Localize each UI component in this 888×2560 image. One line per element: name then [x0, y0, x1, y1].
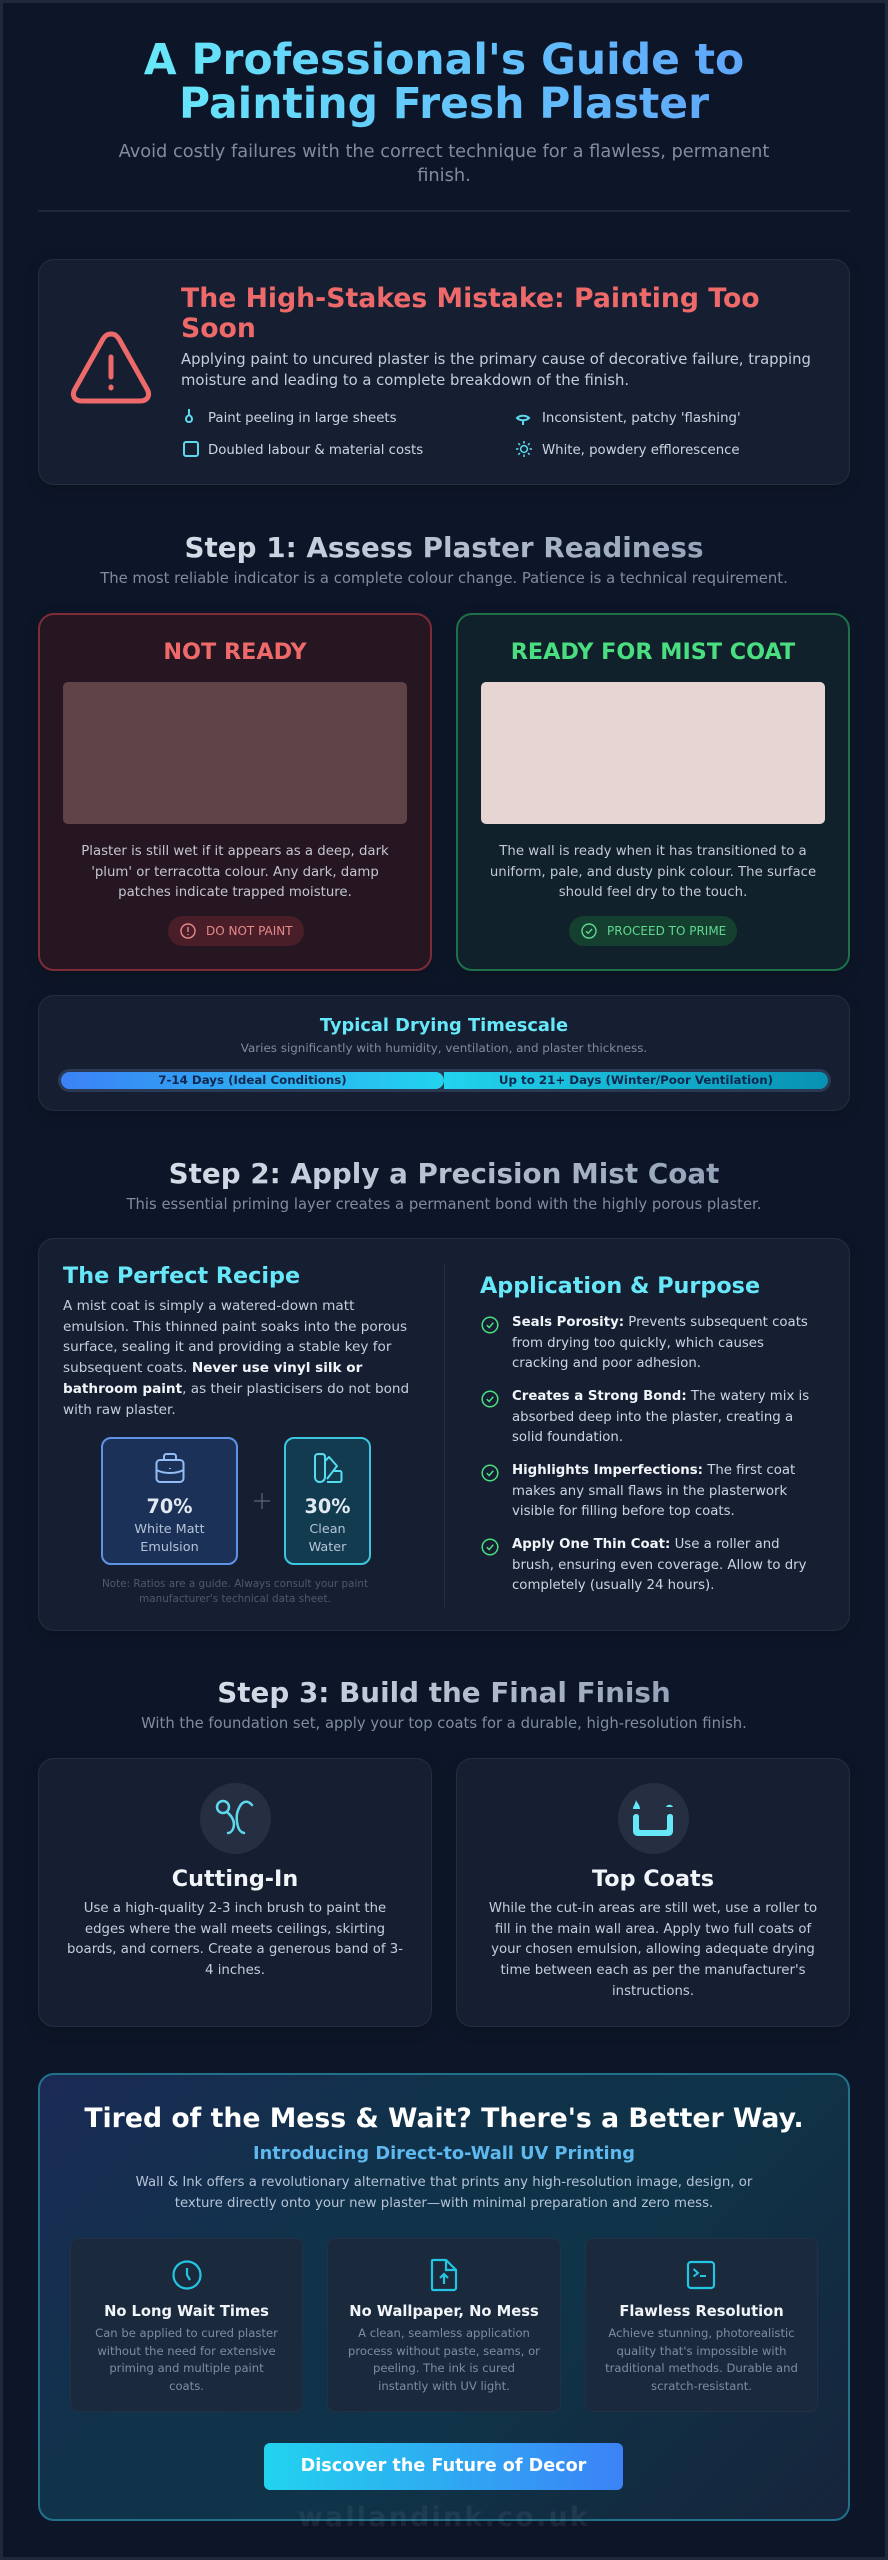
item: flashing: Inconsistent, patchy 'flashing'	[542, 411, 741, 426]
recipe text: surface, sealing it and providing a stable key for	[63, 1339, 391, 1355]
not ready text: patches indicate trapped moisture.	[118, 885, 352, 900]
badge: proceed to prime	[569, 916, 737, 946]
bar segment: winter	[444, 1072, 828, 1089]
top coats text: instructions.	[612, 1984, 694, 1999]
CTA text	[136, 2175, 752, 2211]
swatch: dry plaster	[481, 682, 825, 824]
bar segment: winter: Up to 21+ Days (Winter/Poor Ventilation)	[499, 1073, 773, 1087]
icon: alert circle	[180, 923, 196, 939]
heading: step 3: Step 3: Build the Final Finish	[217, 1676, 671, 1709]
feature title: No Long Wait Times	[104, 2303, 269, 2320]
panel: ready	[456, 613, 850, 971]
roller glyph	[633, 1800, 673, 1836]
top coats text: While the cut-in areas are still wet, use a roller to	[489, 1901, 817, 1916]
recipe text: subsequent coats. Never use vinyl silk or	[63, 1360, 362, 1376]
step 3 subtitle: With the foundation set, apply your top coats for a durable, high-resolution finish.	[141, 1715, 747, 1732]
top coats text: your chosen emulsion, allowing adequate drying	[491, 1942, 815, 1957]
not ready heading: NOT READY	[163, 639, 307, 665]
panel: call to action	[38, 2073, 850, 2521]
feature text: without the need for extensive	[97, 2344, 276, 2358]
cutting-in text: Use a high-quality 2-3 inch brush to paint the	[84, 1901, 386, 1916]
icon: briefcase	[156, 1453, 184, 1483]
icon: flashing	[516, 414, 530, 425]
brush glyph	[216, 1800, 254, 1834]
ratio note: Note: Ratios are a guide. Always consult your paint	[102, 1578, 368, 1590]
icon: costs	[183, 441, 199, 457]
panel: top coats	[456, 1758, 850, 2027]
watermark: wallandink.co.uk	[298, 2502, 590, 2533]
cutting-in text	[67, 1901, 403, 1978]
panel: high-stakes mistake	[38, 259, 850, 485]
top coats heading: Top Coats	[592, 1866, 714, 1892]
label: clean water	[309, 1522, 346, 1555]
item: peeling: Paint peeling in large sheets	[208, 411, 397, 426]
not ready text: 'plum' or terracotta colour. Any dark, damp	[91, 865, 379, 880]
item: thin coat: brush, ensuring even coverage. Allow to dry	[512, 1558, 807, 1573]
icon: check 2	[481, 1390, 499, 1408]
not ready text: Plaster is still wet if it appears as a deep, dark	[81, 844, 389, 859]
feature text	[95, 2326, 278, 2393]
CTA subheading: Introducing Direct-to-Wall UV Printing	[253, 2143, 635, 2164]
icon: file upload	[430, 2258, 458, 2292]
item: seals porosity: Seals Porosity: Prevents subsequent coats	[512, 1315, 808, 1330]
ratio note	[102, 1578, 368, 1605]
title: Painting Fresh Plaster	[179, 80, 709, 129]
CTA text: Wall & Ink offers a revolutionary alternative that prints any high-resolution image, design, or	[136, 2175, 752, 2190]
label: white matt emulsion: Emulsion	[140, 1540, 199, 1555]
recipe text: bathroom paint, as their plasticisers do not bond	[63, 1381, 409, 1397]
top coats text: fill in the main wall area. Apply two full coats of	[495, 1922, 811, 1937]
alert heading: The High-Stakes Mistake: Painting Too	[181, 283, 760, 314]
item: imperfections: visible for filling before top coats.	[512, 1504, 735, 1519]
feature text	[348, 2326, 540, 2393]
alert text	[181, 351, 811, 389]
swatch: wet plaster	[63, 682, 407, 824]
feature text: peeling. The ink is cured	[373, 2361, 515, 2375]
cutting-in text: edges where the wall meets ceilings, skirting	[85, 1922, 385, 1937]
item: imperfections: makes any small flaws in the plasterwork	[512, 1484, 787, 1499]
feature text	[586, 2325, 817, 2396]
item: costs: Doubled labour & material costs	[208, 443, 423, 458]
recipe text: A mist coat is simply a watered-down matt	[63, 1298, 354, 1314]
bar segment: ideal	[61, 1072, 444, 1089]
panel: not ready	[38, 613, 432, 971]
button	[264, 2443, 623, 2490]
cutting-in text: 4 inches.	[205, 1963, 265, 1978]
feature text: traditional methods. Durable and	[605, 2361, 798, 2375]
subtitle: Avoid costly failures with the correct technique for a flawless, permanent	[119, 141, 769, 162]
timescale heading: Typical Drying Timescale	[320, 1015, 568, 1036]
application heading: Application & Purpose	[480, 1273, 760, 1299]
label: clean water: Clean	[309, 1522, 346, 1537]
item: strong bond: solid foundation.	[512, 1430, 623, 1445]
icon: clock	[172, 2260, 202, 2290]
icon: swatch	[314, 1453, 342, 1483]
item: efflorescence: White, powdery efflorescence	[542, 443, 740, 458]
icon: check 3	[481, 1464, 499, 1482]
stat: 30%: 30%	[305, 1495, 350, 1518]
stat: 70%: 70%	[147, 1495, 192, 1518]
item: imperfections	[512, 1463, 795, 1519]
badge label: PROCEED TO PRIME	[607, 924, 726, 938]
title: A Professional's Guide to	[144, 36, 744, 85]
item: strong bond: Creates a Strong Bond: The watery mix is	[512, 1389, 809, 1404]
bar segment: ideal: 7-14 Days (Ideal Conditions)	[158, 1073, 347, 1087]
icon: roller	[618, 1783, 689, 1854]
ratio note: manufacturer's technical data sheet.	[139, 1593, 331, 1605]
CTA text: texture directly onto your new plaster—with minimal preparation and zero mess.	[175, 2196, 713, 2211]
ready text: should feel dry to the touch.	[559, 885, 747, 900]
ratio box: 30% water	[284, 1437, 371, 1565]
button: Discover the Future of Decor	[301, 2456, 586, 2476]
step 1 subtitle: The most reliable indicator is a complete colour change. Patience is a technical requirement.	[100, 570, 788, 587]
feature text: Can be applied to cured plaster	[95, 2326, 278, 2340]
feature: no wallpaper	[327, 2238, 561, 2412]
top coats text: time between each as per the manufacturer's	[500, 1963, 806, 1978]
cutting-in heading: Cutting-In	[172, 1866, 298, 1892]
feature title: No Wallpaper, No Mess	[349, 2303, 539, 2320]
label: white matt emulsion: White Matt	[134, 1522, 205, 1537]
plus sign	[254, 1493, 270, 1509]
feature: flawless resolution	[585, 2238, 818, 2412]
timescale bar	[58, 1069, 831, 1092]
recipe heading: The Perfect Recipe	[63, 1263, 300, 1289]
timescale note: Varies significantly with humidity, ventilation, and plaster thickness.	[241, 1041, 647, 1055]
top coats text	[489, 1901, 817, 1999]
item: imperfections: Highlights Imperfections: The first coat	[512, 1463, 795, 1478]
feature text: A clean, seamless application	[358, 2326, 530, 2340]
icon: sun	[516, 441, 532, 457]
heading: step 1: Step 1: Assess Plaster Readiness	[184, 531, 704, 564]
item: strong bond: absorbed deep into the plaster, creating a	[512, 1410, 793, 1425]
subtitle: finish.	[417, 164, 471, 186]
recipe text: with raw plaster.	[63, 1402, 176, 1418]
icon: warning triangle	[70, 332, 152, 404]
icon: check 1	[481, 1316, 499, 1334]
feature title: Flawless Resolution	[619, 2303, 784, 2320]
icon: brush	[200, 1783, 271, 1854]
feature text: Achieve stunning, photorealistic	[608, 2326, 795, 2340]
item: seals porosity: cracking and poor adhesion.	[512, 1356, 701, 1371]
item: thin coat: completely (usually 24 hours).	[512, 1578, 714, 1593]
CTA heading: Tired of the Mess & Wait? There's a Better Way.	[84, 2103, 804, 2134]
ready text	[490, 844, 816, 900]
label: white matt emulsion	[134, 1522, 205, 1555]
ready text: The wall is ready when it has transitioned to a	[499, 844, 807, 859]
item: strong bond	[512, 1389, 809, 1445]
not ready text	[81, 844, 389, 900]
item: thin coat	[512, 1537, 807, 1593]
badge label: DO NOT PAINT	[206, 924, 293, 938]
heading: step 2: Step 2: Apply a Precision Mist Coat	[169, 1157, 719, 1190]
title	[144, 36, 744, 129]
alert text: moisture and leading to a complete breakdown of the finish.	[181, 372, 629, 389]
icon: check circle	[581, 923, 597, 939]
item: thin coat: Apply One Thin Coat: Use a roller and	[512, 1537, 780, 1552]
icon: terminal	[686, 2260, 716, 2290]
panel: mist coat	[38, 1238, 850, 1631]
feature text: priming and multiple paint	[109, 2361, 264, 2375]
item: seals porosity: from drying too quickly, which causes	[512, 1336, 764, 1351]
step 2 subtitle: This essential priming layer creates a permanent bond with the highly porous plaster.	[127, 1196, 761, 1213]
feature: no long wait times	[70, 2238, 303, 2412]
cutting-in text: boards, and corners. Create a generous band of 3-	[67, 1942, 403, 1957]
feature text: process without paste, seams, or	[348, 2344, 540, 2358]
icon: check 4	[481, 1538, 499, 1556]
panel: drying timescale	[38, 995, 850, 1111]
feature text: coats.	[169, 2379, 204, 2393]
alert heading: Soon	[181, 313, 256, 344]
recipe text: emulsion. This thinned paint soaks into the porous	[63, 1319, 407, 1335]
alert heading	[181, 283, 760, 344]
label: clean water: Water	[309, 1540, 346, 1555]
panel: cutting-in	[38, 1758, 432, 2027]
icon: droplet	[185, 409, 193, 423]
recipe text	[63, 1298, 409, 1418]
feature text: quality that's impossible with	[616, 2344, 787, 2358]
alert text: Applying paint to uncured plaster is the primary cause of decorative failure, trapping	[181, 351, 811, 368]
ratio box: 70% emulsion	[101, 1437, 238, 1565]
ready text: uniform, pale, and dusty pink colour. The surface	[490, 865, 816, 880]
feature text: instantly with UV light.	[378, 2379, 510, 2393]
ready heading: READY FOR MIST COAT	[511, 639, 795, 665]
feature text: scratch-resistant.	[651, 2379, 752, 2393]
badge: do not paint	[168, 916, 304, 946]
subtitle	[118, 141, 769, 186]
item: seals porosity	[512, 1315, 808, 1371]
